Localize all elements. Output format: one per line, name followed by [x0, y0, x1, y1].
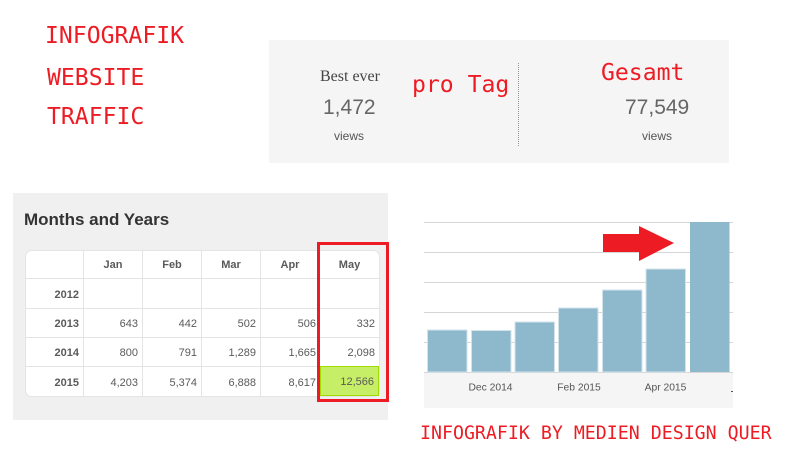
row 2013: 332 — [357, 318, 375, 330]
number: best ever views: 1,472 — [323, 96, 376, 119]
callout: red box around May — [317, 242, 389, 402]
heading: months and years: Months and Years — [24, 210, 169, 229]
panel: stats — [269, 40, 729, 163]
row 2014: 2014 — [55, 347, 79, 359]
row 2014: 1,665 — [288, 347, 316, 359]
label: views left: views — [334, 129, 364, 143]
row 2013 — [54, 318, 375, 330]
table header row: Mar — [221, 259, 241, 271]
table header row: Apr — [281, 259, 299, 271]
bar chart: monthly traffic: Dec 2014 — [468, 382, 513, 394]
number: total views: 77,549 — [625, 96, 689, 119]
row 2014: 2,098 — [347, 347, 375, 359]
row 2015: 6,888 — [228, 377, 256, 389]
table header row: Feb — [162, 259, 182, 271]
divider — [518, 63, 519, 146]
row 2015: 12,566 — [340, 376, 374, 388]
panel: months and years — [13, 193, 388, 420]
row 2014: 1,289 — [228, 347, 256, 359]
table header row — [104, 259, 360, 271]
row 2014: 791 — [179, 347, 197, 359]
table header row: Jan — [104, 259, 122, 271]
title: infografik: INFOGRAFIK — [45, 23, 184, 49]
row 2014: 800 — [120, 347, 138, 359]
footer credit: INFOGRAFIK BY MEDIEN DESIGN QUER — [420, 423, 772, 444]
row 2015: 4,203 — [110, 377, 138, 389]
highlighted cell — [320, 366, 379, 396]
arrow: growth — [603, 226, 674, 261]
title: website: WEBSITE — [47, 65, 144, 91]
label: best ever: Best ever — [320, 68, 380, 85]
row 2015: 8,617 — [288, 377, 316, 389]
row 2014 — [54, 347, 375, 359]
bar chart: monthly traffic: Feb 2015 — [557, 382, 601, 394]
row 2015 — [54, 376, 374, 389]
table: monthly views — [25, 250, 380, 397]
row 2013: 442 — [179, 318, 197, 330]
label: gesamt: Gesamt — [601, 60, 684, 86]
row 2015: 2015 — [55, 377, 79, 389]
label: views right: views — [642, 129, 672, 143]
row 2013: 502 — [238, 318, 256, 330]
row 2012: 2012 — [55, 289, 79, 301]
title: traffic: TRAFFIC — [47, 104, 144, 130]
row 2013: 506 — [298, 318, 316, 330]
row 2015: 5,374 — [169, 377, 197, 389]
row 2013: 643 — [120, 318, 138, 330]
row 2013: 2013 — [55, 318, 79, 330]
bar chart: monthly traffic — [424, 222, 733, 408]
table header row: May — [339, 259, 360, 271]
label: pro tag: pro Tag — [412, 72, 509, 98]
bar chart: monthly traffic: Apr 2015 — [645, 382, 687, 394]
